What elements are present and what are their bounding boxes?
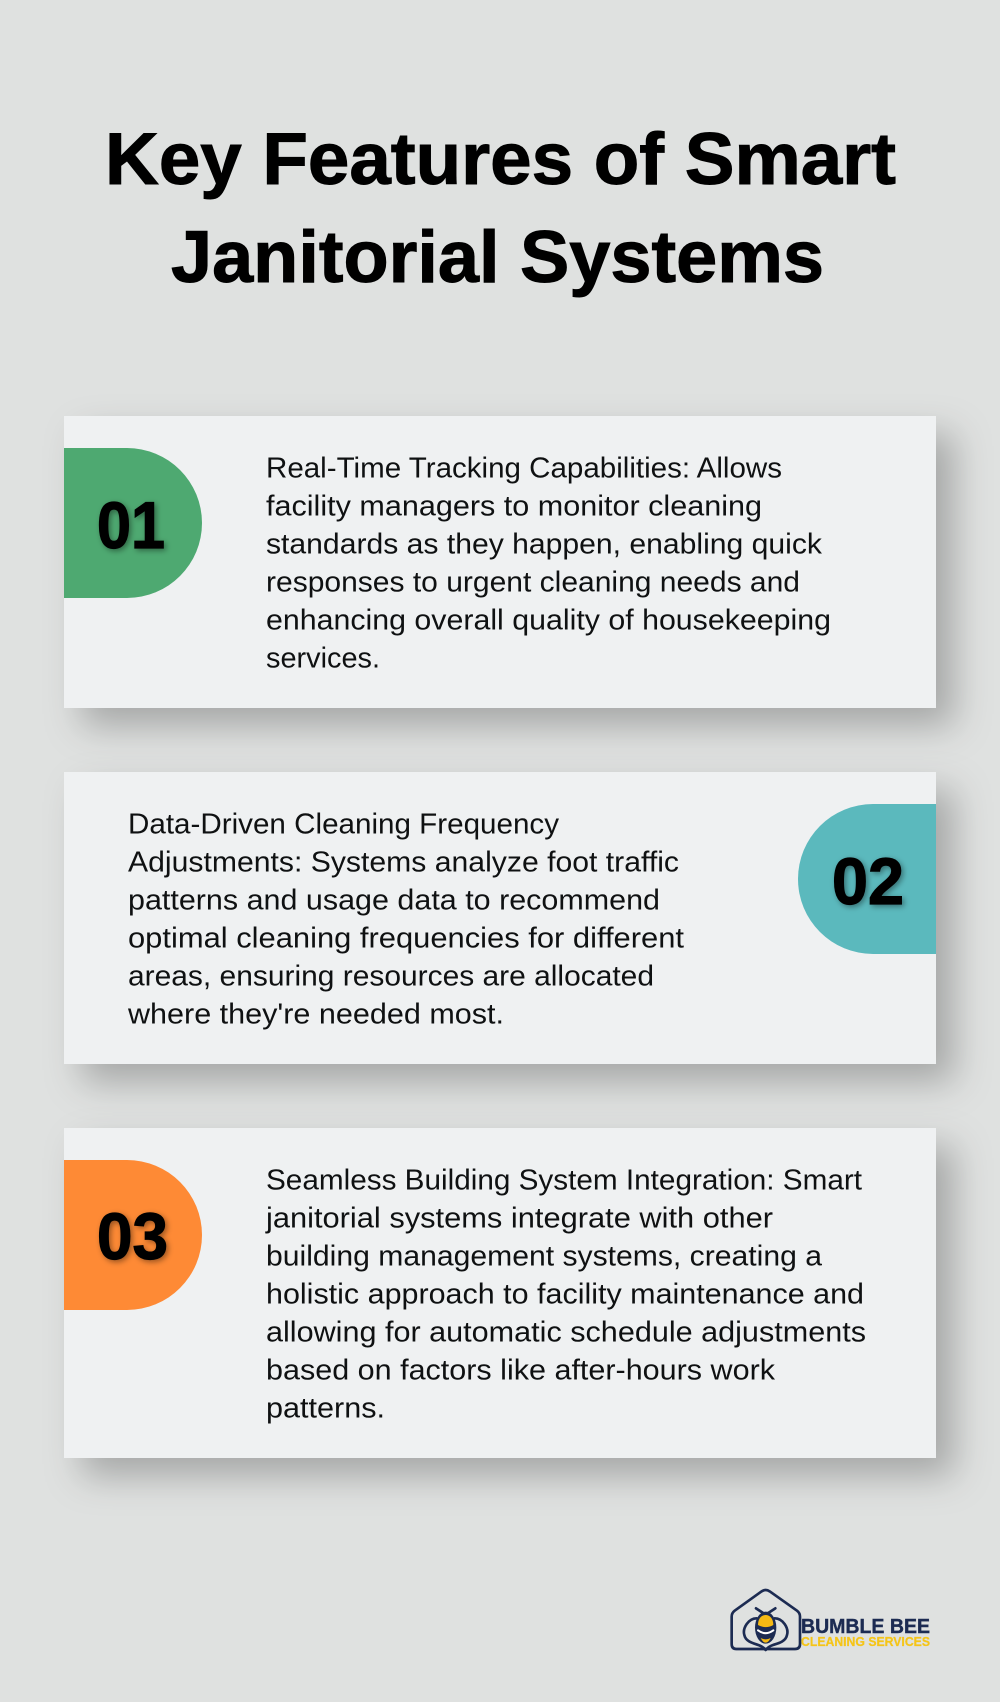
- badge: 02: [798, 804, 936, 954]
- badge: 02: 02: [832, 844, 904, 918]
- text: building integration: janitorial systems integrate with other: [265, 1202, 774, 1234]
- text: data-driven frequency: [127, 808, 684, 1030]
- text: building integration: building management systems, creating a: [266, 1240, 822, 1272]
- logo: Bumble Bee Cleaning Services: [732, 1590, 930, 1650]
- text: building integration: holistic approach to facility maintenance and: [266, 1278, 864, 1310]
- text: real-time tracking: facility managers to monitor cleaning: [266, 490, 762, 522]
- text: data-driven frequency: where they're needed most.: [127, 998, 504, 1030]
- text: data-driven frequency: Data-Driven Cleaning Frequency: [128, 808, 560, 840]
- badge: 03: [64, 1160, 202, 1310]
- text: building integration: allowing for automatic schedule adjustments: [266, 1316, 866, 1348]
- panel: feature 01: [64, 416, 936, 708]
- text: data-driven frequency: areas, ensuring resources are allocated: [128, 960, 654, 992]
- logo wordmark: BUMBLE BEE: [801, 1615, 930, 1638]
- text: building integration: [265, 1164, 866, 1424]
- text: building integration: based on factors like after-hours work: [266, 1354, 776, 1386]
- text: building integration: Seamless Building System Integration: Smart: [266, 1164, 862, 1196]
- badge: 01: 01: [97, 488, 165, 562]
- title: Janitorial Systems: [171, 217, 824, 298]
- text: data-driven frequency: optimal cleaning frequencies for different: [128, 922, 684, 954]
- text: real-time tracking: Real-Time Tracking Capabilities: Allows: [266, 452, 782, 484]
- title: Key Features of Smart: [105, 119, 896, 200]
- badge: 03: 03: [97, 1199, 168, 1273]
- text: data-driven frequency: Adjustments: Systems analyze foot traffic: [128, 846, 679, 878]
- text: real-time tracking: [266, 452, 831, 674]
- text: real-time tracking: services.: [266, 642, 380, 674]
- text: building integration: patterns.: [266, 1392, 385, 1424]
- panel: feature 03: [64, 1128, 936, 1458]
- text: real-time tracking: standards as they happen, enabling quick: [266, 528, 823, 560]
- badge: 01: [64, 448, 202, 598]
- logo tagline: CLEANING SERVICES: [801, 1635, 930, 1649]
- text: real-time tracking: enhancing overall quality of housekeeping: [266, 604, 831, 636]
- panel: feature 02: [64, 772, 936, 1064]
- text: real-time tracking: responses to urgent cleaning needs and: [266, 566, 800, 598]
- icon: house with bee: [732, 1590, 800, 1650]
- text: data-driven frequency: patterns and usage data to recommend: [128, 884, 660, 916]
- title: [105, 119, 896, 298]
